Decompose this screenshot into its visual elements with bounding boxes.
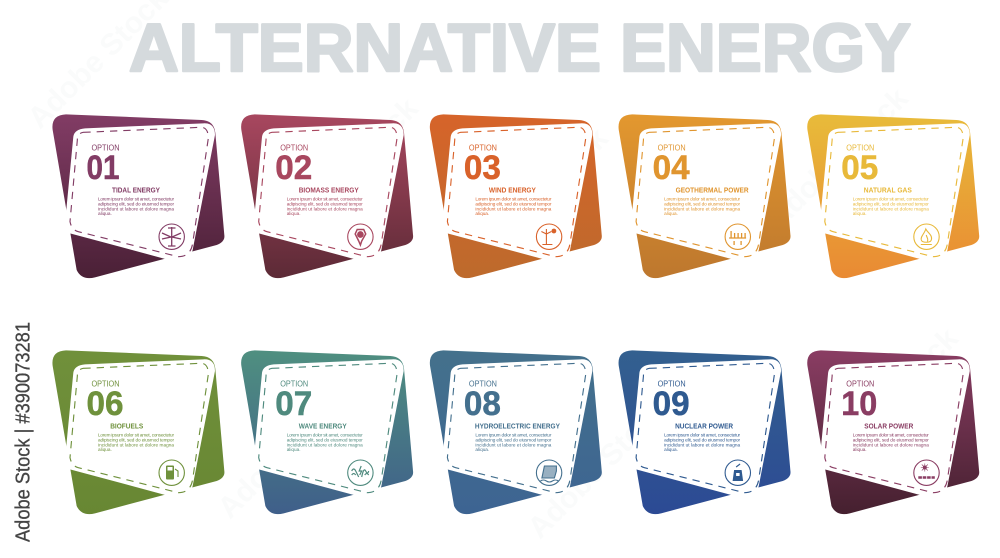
- option label: OPTION: [280, 378, 308, 388]
- card front shape: [254, 359, 404, 495]
- body text: [664, 196, 741, 216]
- body text: Lorem ipsum dolor sit amet, consectetur: [664, 196, 741, 202]
- card front shape: [254, 123, 404, 259]
- dashed outline: [825, 127, 963, 257]
- dashed outline: [825, 363, 963, 493]
- panel: option 04 geothermal power: [619, 114, 791, 278]
- icon: waves and bolt: [348, 460, 373, 485]
- body text: [853, 196, 929, 216]
- panel: option 10 solar power: [807, 350, 979, 514]
- panel: option 03 wind energy: [430, 114, 602, 278]
- card back shape: [52, 350, 224, 514]
- body text: [98, 196, 174, 216]
- card back shape: [241, 114, 413, 278]
- body text: Lorem ipsum dolor sit amet, consectetur: [475, 196, 552, 202]
- body text: incididunt ut labore et dolore magna: [475, 206, 552, 211]
- heading: TIDAL ENERGY: [112, 186, 160, 194]
- card back shape: [52, 114, 224, 278]
- body text: adipiscing elit, sed do eiusmod tempor: [287, 437, 363, 442]
- option label: OPTION: [280, 142, 308, 152]
- body text: adipiscing elit, sed do eiusmod tempor: [287, 201, 363, 206]
- card back shape: [619, 114, 791, 278]
- background watermark: Adobe Stock: [212, 372, 365, 525]
- body text: Lorem ipsum dolor sit amet, consectetur: [853, 196, 929, 202]
- body text: Lorem ipsum dolor sit amet, consectetur: [475, 432, 552, 438]
- heading: BIOFUELS: [110, 422, 143, 430]
- panel: option 06 biofuels: [52, 350, 224, 514]
- number: 03: [464, 149, 501, 187]
- dashed outline: [447, 363, 586, 493]
- body text: aliqua.: [475, 447, 489, 452]
- dashed outline: [636, 363, 774, 493]
- panel: option 01 tidal energy: [52, 114, 224, 278]
- number: 10: [841, 385, 877, 423]
- body text: Lorem ipsum dolor sit amet, consectetur: [287, 196, 363, 202]
- background watermark: Adobe Stock: [522, 392, 675, 545]
- body text: aliqua.: [287, 447, 301, 452]
- option label: OPTION: [658, 142, 686, 152]
- heading: WIND ENERGY: [489, 186, 536, 194]
- number: 05: [841, 149, 878, 187]
- icon: nuclear cooling tower: [725, 460, 750, 485]
- icon: fuel pump: [159, 460, 184, 485]
- panel: option 02 biomass energy: [241, 114, 413, 278]
- heading: NUCLEAR POWER: [675, 422, 734, 430]
- body text: [475, 196, 552, 216]
- card front shape: [820, 123, 970, 259]
- dashed outline: [259, 127, 397, 257]
- body text: aliqua.: [287, 211, 301, 216]
- body text: incididunt ut labore et dolore magna: [98, 206, 174, 211]
- heading: WAVE ENERGY: [299, 422, 347, 430]
- body text: adipiscing elit, sed do eiusmod tempor: [664, 201, 741, 206]
- body text: [853, 432, 929, 452]
- background watermark: Adobe Stock: [812, 322, 965, 475]
- body text: aliqua.: [475, 211, 489, 216]
- body text: incididunt ut labore et dolore magna: [664, 442, 740, 447]
- background watermark: Adobe Stock: [462, 122, 615, 275]
- heading: NATURAL GAS: [864, 186, 912, 194]
- card front shape: [442, 123, 592, 259]
- option label: OPTION: [658, 378, 686, 388]
- number: 01: [86, 149, 120, 187]
- card front shape: [631, 123, 781, 259]
- heading: BIOMASS ENERGY: [299, 186, 359, 194]
- body text: aliqua.: [98, 447, 112, 452]
- card back shape: [619, 350, 791, 514]
- card back shape: [241, 350, 413, 514]
- icon: sun and solar panels: [914, 460, 939, 485]
- option label: OPTION: [469, 378, 497, 388]
- body text: Lorem ipsum dolor sit amet, consectetur: [664, 432, 741, 438]
- body text: aliqua.: [853, 211, 867, 216]
- heading: HYDROELECTRIC ENERGY: [475, 422, 560, 430]
- number: 07: [275, 385, 312, 423]
- body text: adipiscing elit, sed do eiusmod tempor: [853, 201, 929, 206]
- body text: aliqua.: [664, 211, 678, 216]
- body text: incididunt ut labore et dolore magna: [853, 442, 929, 447]
- body text: [287, 432, 363, 452]
- card back shape: [807, 350, 979, 514]
- body text: adipiscing elit, sed do eiusmod tempor: [475, 437, 552, 442]
- body text: incididunt ut labore et dolore magna: [98, 442, 174, 447]
- body text: adipiscing elit, sed do eiusmod tempor: [98, 437, 174, 442]
- body text: Lorem ipsum dolor sit amet, consectetur: [98, 432, 174, 438]
- panel: option 05 natural gas: [807, 114, 979, 278]
- background watermark: Adobe Stock: [272, 92, 425, 245]
- body text: aliqua.: [853, 447, 867, 452]
- body text: [287, 196, 363, 216]
- body text: adipiscing elit, sed do eiusmod tempor: [475, 201, 552, 206]
- icon: gas flame: [914, 224, 939, 249]
- panel: option 07 wave energy: [241, 350, 413, 514]
- title: ALTERNATIVE ENERGY: [129, 10, 911, 86]
- body text: adipiscing elit, sed do eiusmod tempor: [853, 437, 929, 442]
- number: 06: [86, 385, 124, 423]
- card front shape: [631, 359, 781, 495]
- icon: wind turbine: [536, 224, 562, 249]
- option label: OPTION: [846, 378, 874, 388]
- card front shape: [65, 123, 215, 259]
- body text: aliqua.: [98, 211, 112, 216]
- option label: OPTION: [92, 378, 120, 388]
- icon: biomass recycling: [348, 224, 373, 249]
- body text: [98, 432, 174, 452]
- option label: OPTION: [92, 142, 120, 152]
- body text: incididunt ut labore et dolore magna: [475, 442, 552, 447]
- card front shape: [442, 359, 592, 495]
- card back shape: [430, 350, 602, 514]
- body text: adipiscing elit, sed do eiusmod tempor: [98, 201, 174, 206]
- option label: OPTION: [469, 142, 497, 152]
- body text: [475, 432, 552, 452]
- number: 09: [653, 385, 690, 423]
- dashed outline: [70, 363, 208, 493]
- body text: incididunt ut labore et dolore magna: [664, 206, 740, 211]
- body text: incididunt ut labore et dolore magna: [287, 206, 363, 211]
- card front shape: [820, 359, 970, 495]
- dashed outline: [70, 127, 208, 257]
- body text: incididunt ut labore et dolore magna: [853, 206, 929, 211]
- body text: incididunt ut labore et dolore magna: [287, 442, 363, 447]
- heading: SOLAR POWER: [864, 422, 914, 430]
- number: 08: [464, 385, 501, 423]
- option label: OPTION: [846, 142, 874, 152]
- icon: tidal turbine: [159, 224, 184, 249]
- panel: option 09 nuclear power: [619, 350, 791, 514]
- card back shape: [430, 114, 602, 278]
- icon: geothermal plant: [725, 224, 750, 249]
- dashed outline: [447, 127, 586, 257]
- heading: GEOTHERMAL POWER: [676, 186, 749, 194]
- body text: aliqua.: [664, 447, 678, 452]
- number: 04: [653, 149, 690, 187]
- body text: adipiscing elit, sed do eiusmod tempor: [664, 437, 741, 442]
- vertical stock label: Adobe Stock | #390073281: [12, 322, 34, 542]
- body text: [664, 432, 741, 452]
- icon: dam: [536, 460, 562, 485]
- panel: option 08 hydroelectric energy: [430, 350, 602, 514]
- dashed outline: [259, 363, 397, 493]
- body text: Lorem ipsum dolor sit amet, consectetur: [853, 432, 929, 438]
- background watermark: Adobe Stock: [762, 82, 915, 235]
- body text: Lorem ipsum dolor sit amet, consectetur: [98, 196, 174, 202]
- body text: Lorem ipsum dolor sit amet, consectetur: [287, 432, 363, 438]
- card front shape: [65, 359, 215, 495]
- dashed outline: [636, 127, 774, 257]
- card back shape: [807, 114, 979, 278]
- number: 02: [275, 149, 312, 187]
